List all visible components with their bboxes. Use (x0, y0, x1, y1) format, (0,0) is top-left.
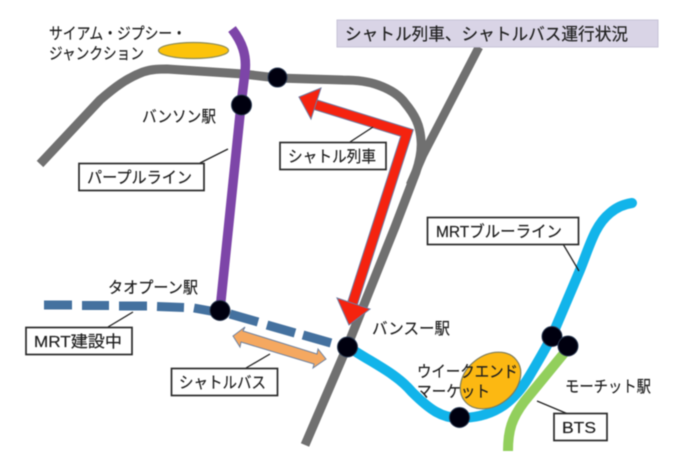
callout: shuttle train: シャトル列車 (288, 148, 376, 166)
shuttle bus double arrow (233, 327, 326, 368)
callout: MRT Blue Line (428, 218, 579, 271)
Siam Gypsy Junction marker (158, 42, 228, 58)
label: Weekend Market: マーケット (417, 383, 490, 401)
purple line (220, 29, 245, 310)
title banner (337, 20, 658, 47)
stations (210, 68, 578, 428)
label: Bang Sue station: バンスー駅 (372, 321, 450, 338)
callout: shuttle train (280, 127, 386, 170)
callout: MRT under construction: MRT建設中 (34, 333, 122, 351)
callout: shuttle bus (172, 354, 278, 396)
Weekend Market marker (449, 340, 532, 421)
label: Siam Gypsy Junction: ジャンクション (49, 45, 144, 63)
gray railway line: diagonal branch (410, 47, 479, 185)
BTS green line (508, 352, 565, 451)
callout: Purple Line: パープルライン (87, 169, 192, 187)
label: Tao Poon station: タオプーン駅 (108, 279, 198, 297)
shuttle train red arrow (299, 88, 407, 325)
callout: MRT Blue Line: MRTブルーライン (436, 222, 562, 241)
gray railway line: curved shuttle route (40, 69, 421, 445)
title banner: シャトル列車、シャトルバス運行状況 (345, 25, 628, 44)
label: Weekend Market (417, 363, 518, 401)
callout: BTS: BTS (562, 420, 596, 437)
label: Weekend Market: ウイークエンド (417, 363, 518, 381)
callout: Purple Line (79, 149, 228, 190)
callout: BTS (537, 401, 607, 440)
label: Bang Son station: バンソン駅 (142, 109, 216, 126)
label: Siam Gypsy Junction: サイアム・ジプシー・ (49, 25, 186, 43)
label: Mo Chit station: モーチット駅 (565, 379, 651, 396)
MRT under construction dashed line (44, 305, 331, 343)
label: Siam Gypsy Junction (49, 25, 186, 63)
MRT blue line (347, 203, 632, 418)
callout: MRT under construction (26, 312, 133, 354)
callout: shuttle bus: シャトルバス (179, 375, 266, 392)
